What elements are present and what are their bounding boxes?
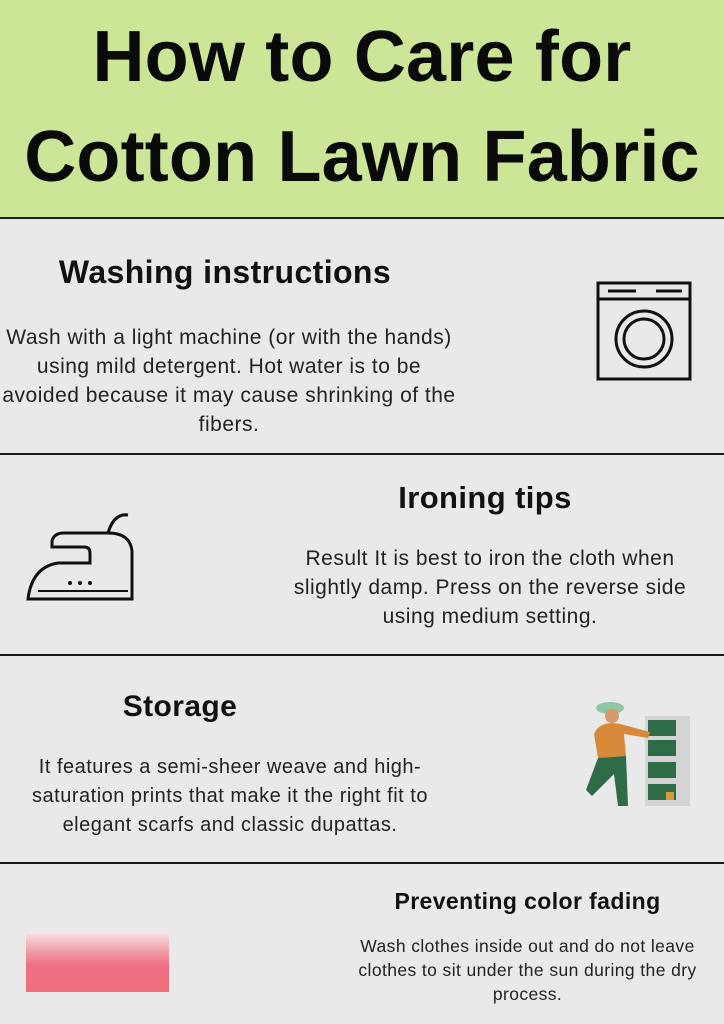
heading: color fading: Preventing color fading xyxy=(394,888,661,914)
text: color fading: clothes to sit under the sun during the dry xyxy=(358,960,697,980)
heading: washing: Washing instructions xyxy=(59,254,391,290)
header panel xyxy=(0,0,724,218)
text: storage: It features a semi-sheer weave and high- xyxy=(39,756,421,778)
title: How to Care for xyxy=(92,17,632,97)
text: color fading: Wash clothes inside out and do not leave xyxy=(360,936,695,956)
text: ironing xyxy=(294,547,686,628)
title xyxy=(24,17,700,197)
panel: color fading xyxy=(26,888,697,1004)
text: washing: avoided because it may cause shrinking of the xyxy=(2,384,456,407)
text: washing xyxy=(2,326,456,436)
heading: storage: Storage xyxy=(123,690,237,723)
swatch: faded pink xyxy=(26,932,169,992)
panel: ironing xyxy=(26,480,686,628)
text: storage: elegant scarfs and classic dupattas. xyxy=(63,814,397,836)
text: ironing: slightly damp. Press on the reverse side xyxy=(294,576,686,599)
text: storage: saturation prints that make it the right fit to xyxy=(32,785,428,807)
icon: iron xyxy=(26,513,134,600)
text: washing: Wash with a light machine (or with the hands) xyxy=(6,326,452,349)
panel: storage xyxy=(32,690,690,836)
icon: person at shelf xyxy=(586,702,690,806)
icon: washing machine xyxy=(596,282,692,380)
title: Cotton Lawn Fabric xyxy=(24,117,700,197)
text: storage xyxy=(32,756,428,836)
text: washing: using mild detergent. Hot water is to be xyxy=(37,355,421,378)
text: color fading xyxy=(358,936,697,1004)
text: washing: fibers. xyxy=(199,413,259,436)
panel: washing xyxy=(2,254,692,436)
text: ironing: Result It is best to iron the cloth when xyxy=(305,547,674,570)
heading: ironing: Ironing tips xyxy=(398,480,572,515)
text: ironing: using medium setting. xyxy=(383,605,597,628)
text: color fading: process. xyxy=(493,984,562,1004)
